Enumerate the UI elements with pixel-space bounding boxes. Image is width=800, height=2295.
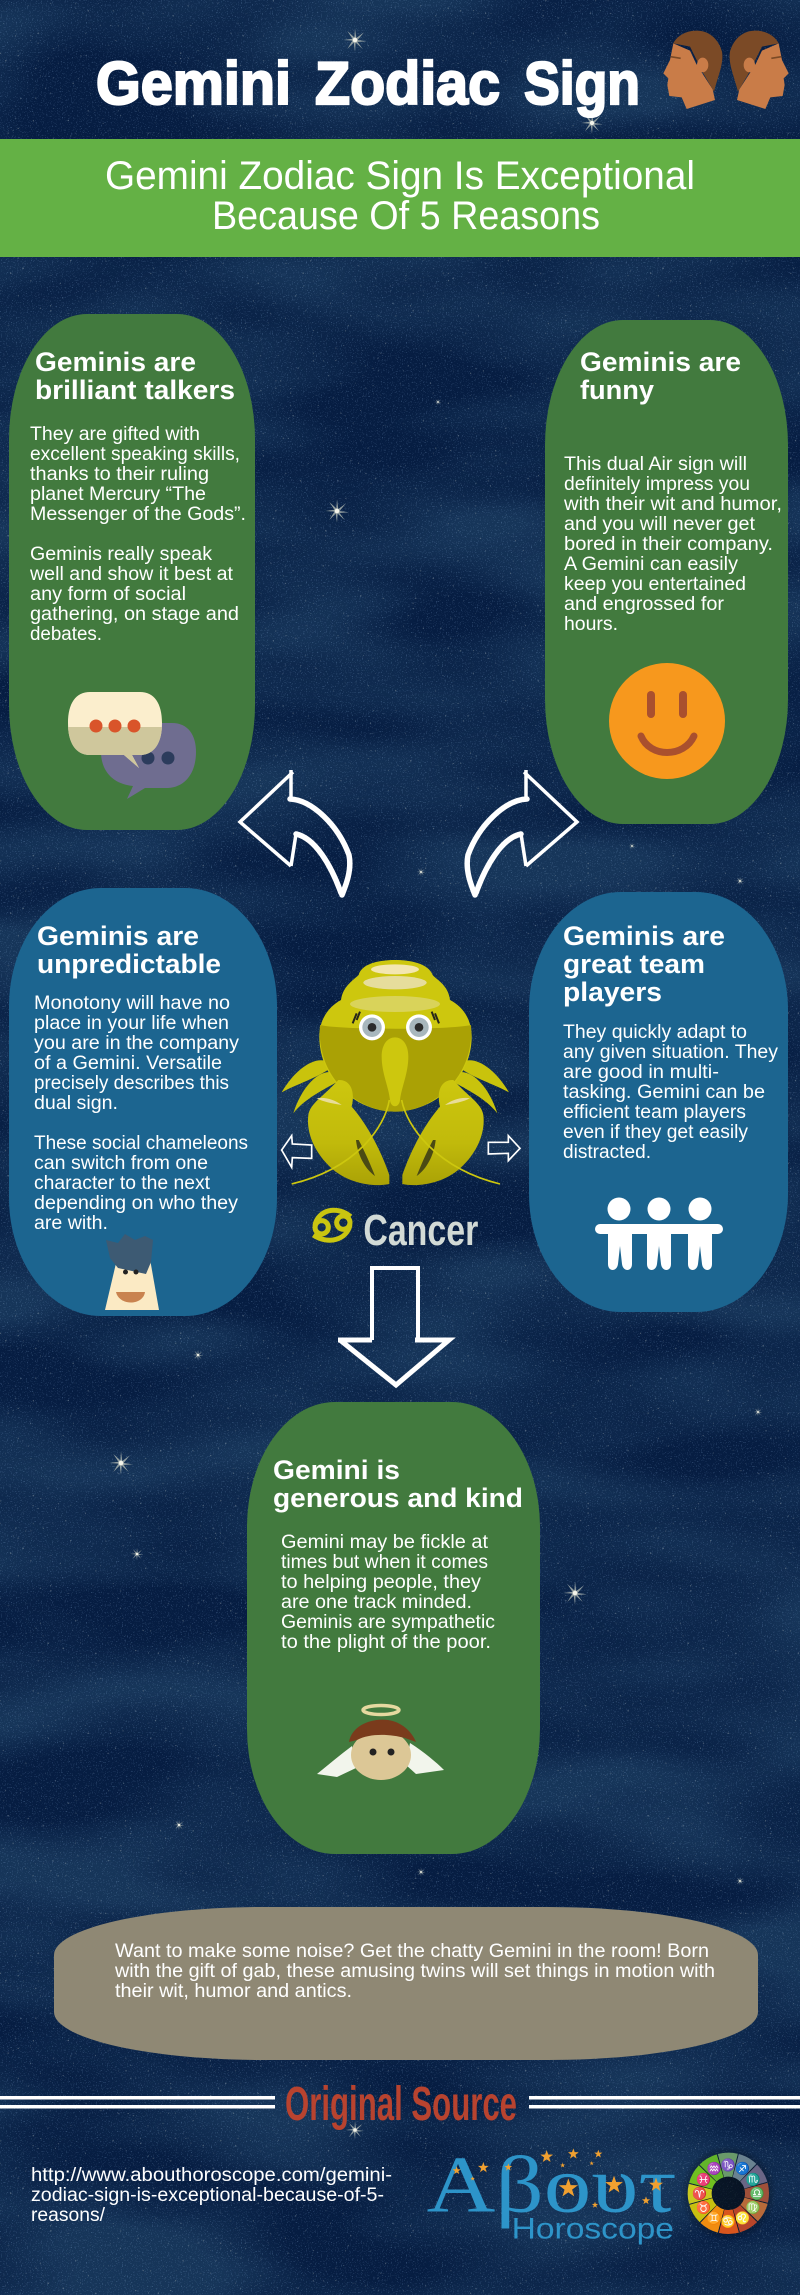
logo zodiac glyphs: ♊ xyxy=(707,2211,722,2225)
logo zodiac glyphs: ♑ xyxy=(721,2158,736,2172)
logo zodiac glyphs: ♒ xyxy=(707,2162,722,2176)
title: Gemini xyxy=(96,50,291,117)
arrow: up right xyxy=(467,770,577,895)
text: funny body: with their wit and humor, xyxy=(563,494,782,515)
text: unpredictable body: Monotony will have no xyxy=(34,993,230,1014)
logo zodiac glyphs: ♐ xyxy=(735,2162,750,2176)
text: team players body: They quickly adapt to xyxy=(563,1022,747,1043)
text: funny body: and you will never get xyxy=(564,514,756,535)
text: funny body: and engrossed for xyxy=(564,594,725,615)
text: unpredictable body: of a Gemini. Versatile xyxy=(34,1053,222,1074)
icon: speech bubbles xyxy=(68,692,196,799)
text: generous body xyxy=(281,1532,495,1653)
callout: chatty gemini: their wit, humor and antics. xyxy=(115,1981,352,2002)
heading: generous and kind xyxy=(273,1455,523,1513)
label: cancer: Cancer xyxy=(363,1207,478,1255)
logo zodiac wheel xyxy=(680,2145,777,2242)
heading: original source: Original Source xyxy=(285,2078,517,2131)
callout: chatty gemini: with the gift of gab, these amusing twins will set things in motion with xyxy=(114,1961,715,1982)
text: team players body: tasking. Gemini can be xyxy=(563,1082,765,1103)
text: team players body: efficient team players xyxy=(563,1102,746,1123)
text: unpredictable body xyxy=(34,993,248,1234)
text: funny body: hours. xyxy=(564,614,618,635)
text: generous body: times but when it comes xyxy=(281,1552,488,1573)
text: brilliant talkers body: Geminis really speak xyxy=(30,544,213,565)
logo subtitle: Horoscope xyxy=(512,2212,674,2245)
panel: unpredictable xyxy=(9,888,277,1316)
text: funny body: definitely impress you xyxy=(564,474,750,495)
heading: great team players: great team xyxy=(563,949,705,979)
panel: great team players xyxy=(529,892,788,1312)
heading: funny xyxy=(580,347,741,405)
heading: great team players: players xyxy=(563,977,662,1007)
text: funny body: A Gemini can easily xyxy=(564,554,739,575)
text: unpredictable body: are with. xyxy=(34,1213,108,1234)
text: generous body: Gemini may be fickle at xyxy=(281,1532,489,1553)
heading: funny: funny xyxy=(580,375,654,405)
text: source url xyxy=(31,2165,392,2226)
text: brilliant talkers body: planet Mercury “The xyxy=(30,484,206,505)
logo zodiac glyphs: ♌ xyxy=(735,2211,750,2225)
subtitle banner xyxy=(0,139,800,257)
text: generous body: to helping people, they xyxy=(281,1572,482,1593)
heading: great team players: Geminis are xyxy=(563,921,725,951)
icon: small arrow left xyxy=(282,1136,312,1167)
text: brilliant talkers body: Messenger of the Gods”. xyxy=(30,504,246,525)
text: team players body: are good in multi- xyxy=(563,1062,719,1083)
logo: about horoscope xyxy=(427,2142,777,2245)
text: team players body xyxy=(563,1022,779,1163)
illustration: cancer crab xyxy=(282,960,520,1255)
text: unpredictable body: you are in the company xyxy=(34,1033,240,1054)
text: unpredictable body: dual sign. xyxy=(34,1093,118,1114)
text: funny body xyxy=(563,454,782,635)
panel: generous and kind xyxy=(247,1402,540,1854)
icon: smiley xyxy=(609,663,725,779)
text: funny body: keep you entertained xyxy=(564,574,746,595)
text: unpredictable body: These social chameleons xyxy=(34,1133,248,1154)
heading: original source xyxy=(0,2078,800,2131)
icon: cancer zodiac symbol xyxy=(313,1210,351,1240)
title: Zodiac xyxy=(315,50,500,117)
logo zodiac glyphs: ♉ xyxy=(696,2201,711,2215)
logo zodiac glyphs: ♎ xyxy=(750,2186,765,2200)
icon: twin heads xyxy=(663,31,789,109)
logo zodiac glyphs: ♍ xyxy=(746,2201,761,2215)
heading: unpredictable: unpredictable xyxy=(37,949,221,979)
text: brilliant talkers body: gathering, on stage and xyxy=(30,604,239,625)
callout: chatty gemini xyxy=(54,1907,758,2060)
logo zodiac glyphs: ♏ xyxy=(746,2172,761,2186)
logo zodiac glyphs: ♈ xyxy=(692,2186,707,2200)
text: funny body: This dual Air sign will xyxy=(564,454,747,475)
heading: brilliant talkers: Geminis are xyxy=(35,347,196,377)
logo stars xyxy=(453,2148,663,2208)
icon: small arrow right xyxy=(488,1136,520,1161)
title xyxy=(96,50,640,117)
text: brilliant talkers body: thanks to their ruling xyxy=(30,464,209,485)
text: unpredictable body: precisely describes this xyxy=(34,1073,229,1094)
arrow: down xyxy=(338,1268,449,1385)
panel: brilliant talkers xyxy=(9,314,255,830)
heading: generous and kind: Gemini is xyxy=(273,1455,400,1485)
text: source url: http://www.abouthoroscope.com/gemini- xyxy=(31,2165,392,2186)
heading: great team players xyxy=(563,921,725,1007)
title: Sign xyxy=(524,50,640,117)
text: generous body: are one track minded. xyxy=(281,1592,472,1613)
heading: funny: Geminis are xyxy=(580,347,741,377)
heading: brilliant talkers xyxy=(35,347,235,405)
subtitle banner: Because Of 5 Reasons xyxy=(212,194,600,238)
text: team players body: distracted. xyxy=(563,1142,651,1163)
text: generous body: to the plight of the poor. xyxy=(281,1632,491,1653)
subtitle banner: Gemini Zodiac Sign Is Exceptional xyxy=(105,154,695,198)
text: brilliant talkers body xyxy=(29,424,246,645)
text: generous body: Geminis are sympathetic xyxy=(281,1612,495,1633)
heading: unpredictable xyxy=(37,921,221,979)
text: source url: zodiac-sign-is-exceptional-because-of-5- xyxy=(31,2185,384,2206)
text: unpredictable body: can switch from one xyxy=(34,1153,208,1174)
text: funny body: bored in their company. xyxy=(564,534,773,555)
icon: quirky face xyxy=(105,1234,159,1310)
text: brilliant talkers body: excellent speaking skills, xyxy=(30,444,240,465)
text: team players body: even if they get easily xyxy=(563,1122,749,1143)
callout: chatty gemini: Want to make some noise? Get the chatty Gemini in the room! Born xyxy=(115,1941,709,1962)
text: unpredictable body: place in your life when xyxy=(34,1013,229,1034)
logo zodiac glyphs: ♋ xyxy=(721,2215,736,2229)
icon: three people xyxy=(595,1198,723,1270)
text: team players body: any given situation. They xyxy=(563,1042,779,1063)
logo zodiac glyphs xyxy=(692,2158,765,2229)
text: brilliant talkers body: any form of social xyxy=(30,584,186,605)
text: brilliant talkers body: They are gifted with xyxy=(30,424,200,445)
arrow: up left xyxy=(240,770,350,895)
logo zodiac glyphs: ♓ xyxy=(696,2172,711,2186)
text: brilliant talkers body: debates. xyxy=(30,624,102,645)
text: brilliant talkers body: well and show it best at xyxy=(29,564,234,585)
panel: funny xyxy=(545,320,788,824)
heading: generous and kind: generous and kind xyxy=(273,1483,523,1513)
logo wordmark: Aβουτ xyxy=(427,2142,677,2230)
heading: unpredictable: Geminis are xyxy=(37,921,199,951)
heading: brilliant talkers: brilliant talkers xyxy=(35,375,235,405)
text: unpredictable body: character to the next xyxy=(34,1173,211,1194)
text: source url: reasons/ xyxy=(31,2205,106,2226)
icon: angel face xyxy=(317,1706,444,1780)
text: unpredictable body: depending on who they xyxy=(34,1193,239,1214)
